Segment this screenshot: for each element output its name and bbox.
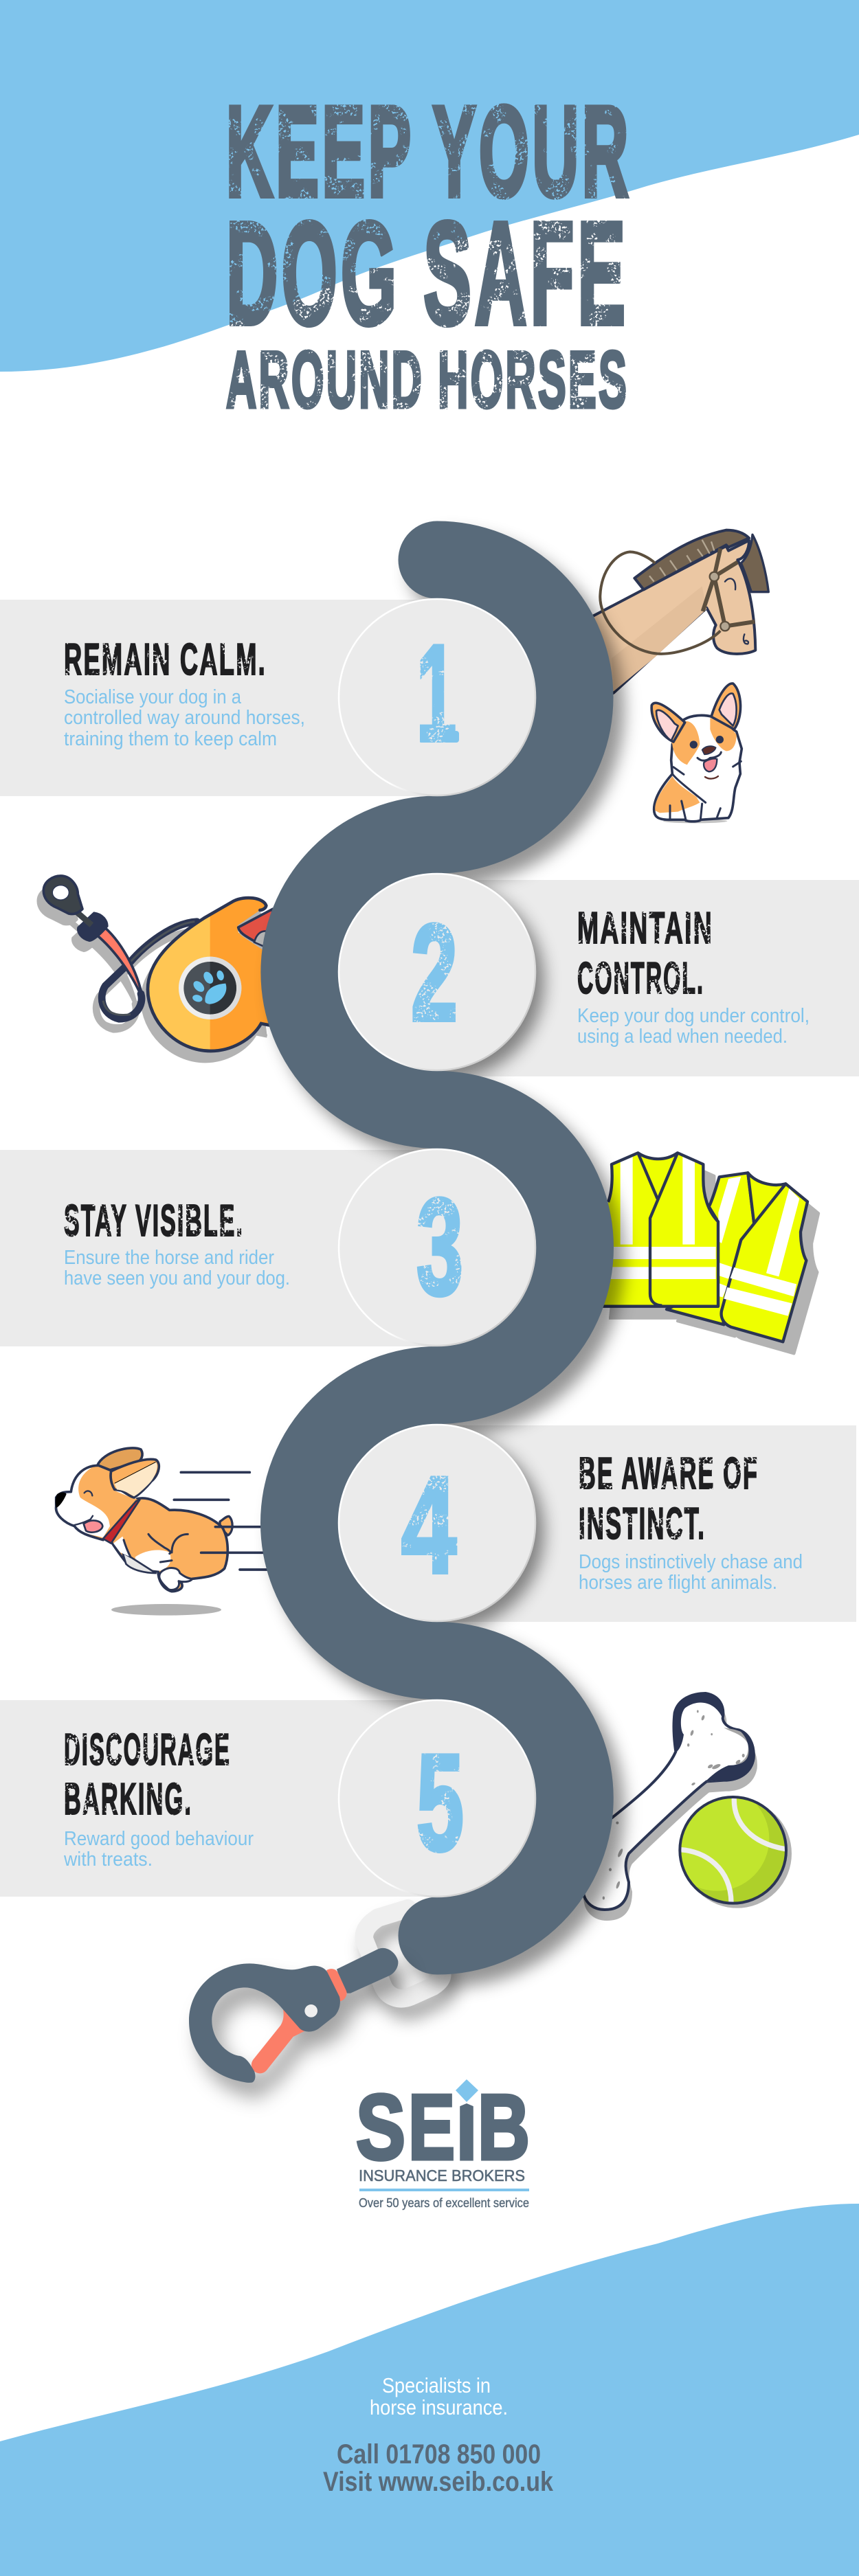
logo: SEIB Insurance Brokers: E <box>408 2075 455 2179</box>
footer text: Visit www.seib.co.uk <box>323 2467 554 2497</box>
step 4 circle and number <box>339 1425 535 1621</box>
step 3 text: STAY VISIBLE. <box>64 1195 244 1245</box>
footer text: Call 01708 850 000 <box>337 2439 541 2470</box>
step 2 text: MAINTAIN <box>577 903 713 953</box>
step 4 text: horses are flight animals. <box>579 1572 777 1594</box>
step 4 circle and number: 4 <box>401 1449 456 1602</box>
panel: step 4 background <box>437 1425 856 1622</box>
logo: SEIB Insurance Brokers: Over 50 years of excellent service <box>359 2196 529 2210</box>
step 1 text: Socialise your dog in a <box>64 686 242 708</box>
icon: sitting corgi <box>651 683 741 823</box>
step 5 text: Reward good behaviour <box>64 1828 254 1850</box>
step 5 text: with treats. <box>63 1849 153 1871</box>
logo: SEIB Insurance Brokers: INSURANCE BROKERS <box>359 2167 525 2184</box>
logo: SEIB Insurance Brokers <box>356 2075 530 2210</box>
top wave background <box>0 0 859 372</box>
step 2 text: Keep your dog under control, <box>577 1005 810 1027</box>
step 4 text <box>579 1448 803 1594</box>
step 1 text: training them to keep calm <box>64 728 277 750</box>
step 2 circle and number: 2 <box>411 896 458 1050</box>
serpentine ribbon <box>300 560 574 1936</box>
step 3 circle and number: 3 <box>416 1171 463 1324</box>
circle shadows <box>339 874 535 1621</box>
icon: tennis ball <box>665 1787 786 1903</box>
footer text: horse insurance. <box>370 2395 508 2419</box>
step 3 text <box>64 1195 290 1289</box>
panel: step 2 background <box>437 880 859 1076</box>
step 4 text: INSTINCT. <box>579 1498 706 1548</box>
step 3 text: have seen you and your dog. <box>64 1267 290 1289</box>
step 3 circle and number <box>339 1149 535 1346</box>
icon: lead clip at ribbon end <box>189 1948 398 2083</box>
step 1 text: controlled way around horses, <box>64 707 305 729</box>
step 2 text <box>577 903 810 1048</box>
step 4 text: Dogs instinctively chase and <box>579 1551 803 1573</box>
step 5 text: BARKING. <box>64 1774 192 1824</box>
panel: step 1 background <box>0 600 440 796</box>
footer text: Specialists in <box>382 2373 491 2397</box>
step 2 text: using a lead when needed. <box>577 1026 788 1048</box>
logo: SEIB Insurance Brokers: B <box>478 2075 530 2179</box>
icon: lead ring <box>364 1908 442 1998</box>
step 5 circle and number <box>339 1700 535 1897</box>
step 5 circle and number: 5 <box>416 1726 464 1879</box>
step 1 text: REMAIN CALM. <box>64 634 267 684</box>
step 1 circle and number: 1 <box>416 617 456 770</box>
icon: hi-vis vests <box>598 1153 807 1342</box>
step 5 text: DISCOURAGE <box>64 1724 231 1774</box>
step 2 text: CONTROL. <box>577 953 704 1003</box>
step 5 text <box>63 1724 254 1871</box>
logo: SEIB Insurance Brokers: I <box>456 2075 477 2179</box>
step 3 text: Ensure the horse and rider <box>64 1247 274 1269</box>
icon: retractable dog lead <box>43 876 273 1051</box>
step 1 text <box>64 634 305 750</box>
step 1 circle and number <box>339 599 535 795</box>
panel: step 3 background <box>0 1150 440 1346</box>
step 2 circle and number <box>339 874 535 1070</box>
title <box>226 80 632 425</box>
logo: SEIB Insurance Brokers: S <box>356 2075 405 2179</box>
icon: running corgi <box>56 1448 268 1616</box>
icon: horse head <box>591 530 768 705</box>
bottom wave background <box>0 2204 859 2576</box>
footer text <box>323 2373 554 2497</box>
panel: step 5 background <box>0 1700 440 1897</box>
icon: bone <box>572 1693 754 1910</box>
